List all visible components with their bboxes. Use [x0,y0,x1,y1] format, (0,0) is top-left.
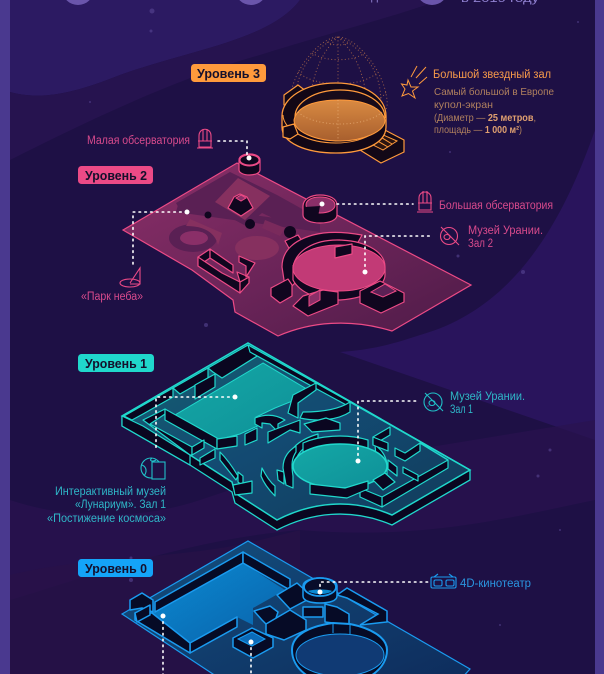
central hall [303,436,368,453]
large room [175,363,305,440]
icon and text: Lunarium [47,458,166,525]
icon and text: big observatory [417,191,553,212]
leaders level 1 [156,394,417,464]
hall body [360,128,404,163]
level 3: star hall [282,37,404,163]
icon and text: small observatory: Малая обсерватория [87,135,190,147]
text: star hall [433,69,554,136]
main hall [271,232,404,316]
icon and text: small observatory [87,129,213,148]
icon and text: Urania museum hall 2 [440,225,543,250]
leaders level 0 [160,582,428,674]
level 2 plane [123,154,471,336]
icon and text: 4D cinema: 4D-кинотеатр [460,578,531,590]
icon and text: big observatory: Большая обсерватория [439,200,553,212]
pyramid [228,194,253,216]
side rooms [373,427,390,445]
top circles and cropped captions [62,0,540,5]
dome [290,37,387,128]
right wing [337,588,387,625]
level 1 plan [122,343,470,530]
big observatory [303,195,337,223]
icon and text: museum hall 1: Музей Урании. [450,391,525,403]
leaders level 2 [133,141,431,274]
text: star hall: Самый большой в Европе [434,86,554,98]
circle hall [292,623,387,674]
label: level 2: Уровень 2 [85,168,147,183]
outer walls [122,345,470,507]
small observatory [239,154,260,175]
icon and text: sky park: «Парк неба» [81,291,143,303]
text: star hall: (Диаметр — 25 метров, [434,112,536,124]
big room [152,563,285,643]
text: star hall: площадь — 1 000 м²) [434,124,522,136]
text: star hall: Большой звездный зал [433,69,551,81]
icon and text: Urania museum hall 2: Музей Урании. [468,225,543,237]
park paths [169,172,320,252]
icon and text: Lunarium: «Лунариум». Зал 1 [75,499,166,511]
4D cinema [303,578,337,603]
icon and text: sky park [81,268,143,303]
small rooms [233,628,273,658]
icon and text: Urania museum hall 2: Зал 2 [468,238,493,250]
level 0 plan [122,541,470,674]
label: level 0: Уровень 0 [85,561,147,576]
wall blocks [198,249,255,293]
label: level 1: Уровень 1 [85,356,147,371]
icon and text: museum hall 1 [424,391,525,416]
icon: shooting star [402,66,427,98]
lower-left walls [220,452,238,480]
icon and text: Lunarium: Интерактивный музей [55,486,166,498]
icon and text: Lunarium: «Постижение космоса» [47,513,166,525]
icon and text: 4D cinema [431,574,531,590]
icon and text: museum hall 1: Зал 1 [450,404,473,416]
centre pieces [255,415,285,432]
label: level 3: Уровень 3 [197,66,260,81]
text: star hall: купол-экран [434,99,493,111]
